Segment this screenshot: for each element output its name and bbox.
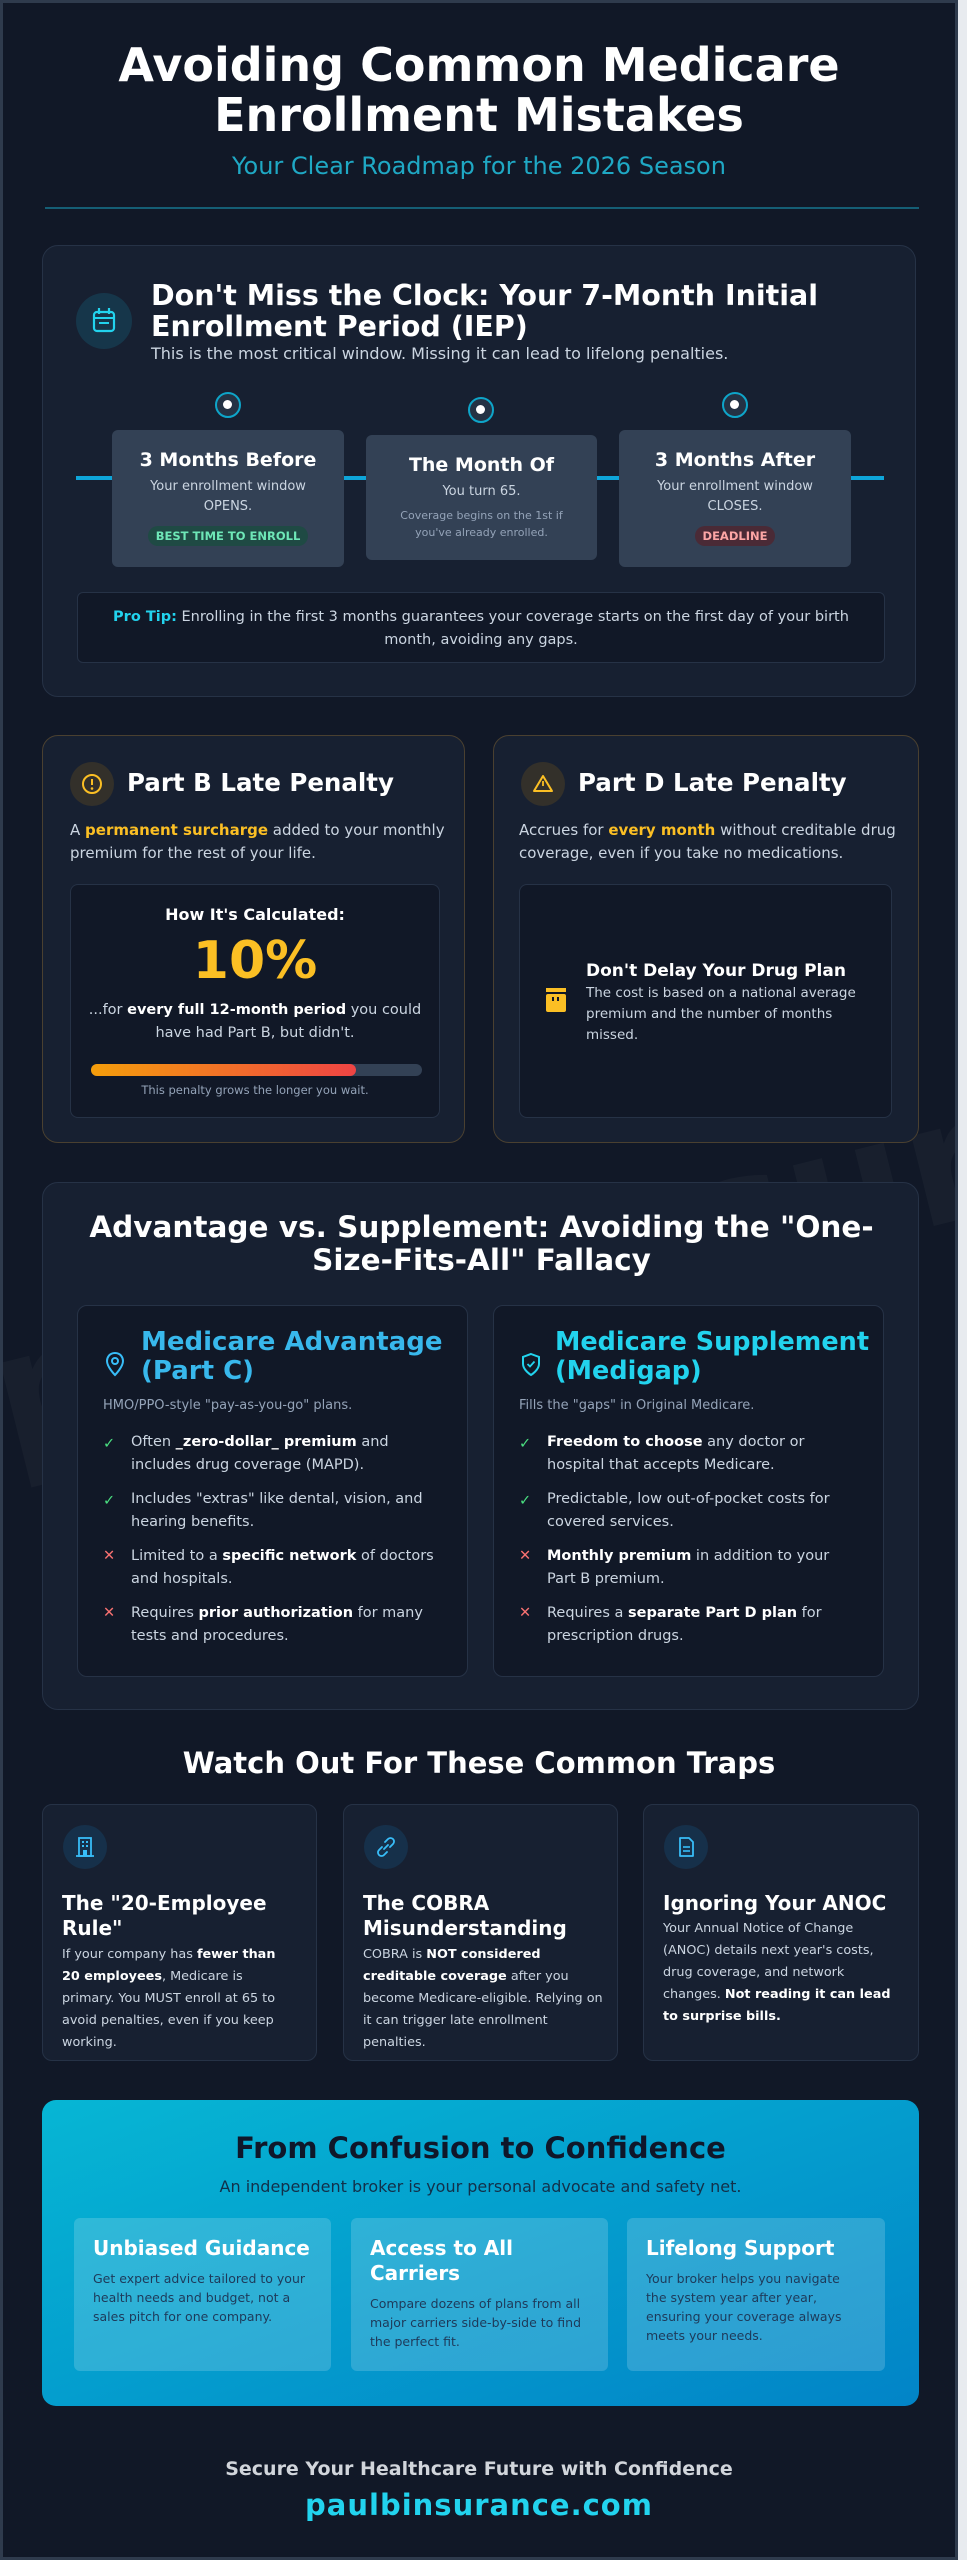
card: Medicare Advantage: ✕ [103,1548,115,1564]
box: 3 months after [619,430,851,567]
calc box: ...for every full 12-month period you could have had Part B, but didn't. [89,1002,421,1041]
subtitle: Your Clear Roadmap for the 2026 Season [232,152,726,180]
trap card: 20-employee: If your company has fewer than 20 employees, Medicare is primary. You MUST enroll at 65 to avoid penalties, even if you keep working. [62,1947,275,2050]
panel: CTA confidence [42,2100,919,2406]
box: month of [366,435,597,560]
card: Medicare Advantage: (Part C) [141,1356,254,1386]
box: 3 months before: OPENS. [204,499,252,514]
panel: CTA confidence: From Confusion to Confidence [235,2131,726,2165]
card: Medicare Supplement: ✓ [519,1493,531,1509]
benefit: carriers: Access to All Carriers [370,2236,513,2285]
timeline [76,392,884,567]
panel: Advantage vs Supplement [42,1182,919,1710]
10%: 10% [193,931,317,991]
card: Medicare Supplement: ✕ [519,1605,531,1621]
trap card: COBRA: COBRA is NOT considered creditable coverage after you become Medicare-eligible. Relying on it can trigger late enrollment penalties. [363,1947,603,2050]
panel: Part D penalty [493,735,919,1143]
box: 3 months before [112,430,344,567]
benefit: lifelong: Lifelong Support [646,2236,834,2260]
card: Medicare Advantage: ✓ [103,1493,115,1509]
card: Medicare Advantage: Often _zero-dollar_ premium and includes drug coverage (MAPD). [131,1434,389,1473]
footer url: paulbinsurance.com [305,2488,653,2522]
heading: Part B Late Penalty [127,768,394,797]
drug plan box [519,884,892,1118]
heading: traps: Watch Out For These Common Traps [183,1746,775,1780]
panel: IEP [42,245,916,697]
card: Medicare Advantage: ✓ [103,1436,115,1452]
dot 1 [215,392,241,418]
card: Medicare Supplement: Monthly premium in addition to your Part B premium. [547,1548,829,1587]
benefit: unbiased: Unbiased Guidance [93,2236,310,2260]
trap card: COBRA [343,1804,618,2061]
footer tagline: Secure Your Healthcare Future with Confidence [225,2458,733,2480]
trap card: COBRA: The COBRA Misunderstanding [363,1891,567,1940]
icon: calendar [76,293,132,349]
card: Medicare Supplement: Predictable, low out-of-pocket costs for covered services. [547,1491,830,1530]
box: 3 months before: 3 Months Before [140,449,316,471]
card: Medicare Advantage: Includes "extras" like dental, vision, and hearing benefits. [131,1491,423,1530]
icon: alert [70,762,114,806]
panel: Part B penalty [42,735,465,1143]
card: Medicare Supplement: Fills the "gaps" in Original Medicare. [519,1398,754,1413]
card: Medicare Supplement: Freedom to choose any doctor or hospital that accepts Medicare. [547,1434,804,1473]
benefit: carriers: Compare dozens of plans from all major carriers side-by-side to find the perfect fit. [370,2296,581,2349]
drug plan box: The cost is based on a national average premium and the number of months missed. [586,985,856,1043]
heading: Advantage vs. Supplement: Avoiding the "One-Size-Fits-All" Fallacy [89,1210,874,1277]
dot 3 [722,392,748,418]
pro tip [77,592,885,663]
card: Medicare Advantage: ✕ [103,1605,115,1621]
icon: pill bottle [546,988,566,1012]
box: month of: You turn 65. [442,484,521,499]
box: 3 months after: Your enrollment window [657,479,813,494]
trap card: ANOC [643,1804,919,2061]
box: month of: Coverage begins on the 1st if [400,509,563,522]
card: Medicare Supplement: (Medigap) [555,1356,702,1386]
trap card: ANOC: Your Annual Notice of Change (ANOC) details next year's costs, drug coverage, and network changes. Not reading it can lead to surprise bills. [663,1921,890,2024]
benefit: unbiased [74,2218,331,2371]
box: 3 months before: Your enrollment window [150,479,306,494]
dot 2 [468,397,494,423]
trap card: 20-employee [42,1804,317,2061]
progress bar [91,1064,422,1076]
benefit: carriers [351,2218,608,2371]
card: Medicare Advantage [77,1305,468,1677]
panel: CTA confidence: An independent broker is your personal advocate and safety net. [220,2177,741,2196]
box: 3 months after: 3 Months After [655,449,815,471]
drug plan box: Don't Delay Your Drug Plan [586,961,846,981]
card: Medicare Supplement: ✕ [519,1548,531,1564]
heading: Part D Late Penalty [578,768,847,797]
box: month of: The Month Of [409,454,554,476]
icon: warning [521,762,565,806]
subtext: This is the most critical window. Missing it can lead to lifelong penalties. [151,344,728,363]
title: Enrollment Mistakes [214,88,744,142]
benefit: lifelong: Your broker helps you navigate the system year after year, ensuring your coverage always meets your needs. [646,2271,842,2343]
trap card: ANOC: Ignoring Your ANOC [663,1891,886,1915]
box: month of: you've already enrolled. [415,526,548,539]
benefit: unbiased: Get expert advice tailored to your health needs and budget, not a sales pitch for one company. [93,2271,305,2324]
card: Medicare Supplement: ✓ [519,1436,531,1452]
heading: Don't Miss the Clock: Your 7-Month Initial Enrollment Period (IEP) [151,279,818,343]
card: Medicare Advantage: Limited to a specific network of doctors and hospitals. [131,1548,434,1587]
trap card: 20-employee: The "20-Employee Rule" [62,1891,267,1940]
calc box [70,884,440,1118]
card: Medicare Advantage: Medicare Advantage [141,1327,442,1357]
calc box: This penalty grows the longer you wait. [141,1083,369,1097]
benefit: lifelong [627,2218,885,2371]
desc: Accrues for every month without creditable drug coverage, even if you take no medications. [519,821,896,862]
calc box: How It's Calculated: [165,905,345,924]
box: 3 months after: CLOSES. [708,499,762,514]
card: Medicare Supplement [493,1305,884,1677]
pro tip: Pro Tip: Enrolling in the first 3 months guarantees your coverage starts on the first day of your birth month, avoiding any gaps. [113,609,849,648]
card: Medicare Advantage: HMO/PPO-style "pay-as-you-go" plans. [103,1398,352,1413]
card: Medicare Supplement: Requires a separate Part D plan for prescription drugs. [547,1605,822,1644]
desc: A permanent surcharge added to your monthly premium for the rest of your life. [70,821,445,862]
box: 3 months after: DEADLINE [703,529,767,543]
title: Avoiding Common Medicare [118,38,840,92]
box: 3 months before: BEST TIME TO ENROLL [156,529,300,543]
card: Medicare Supplement: Medicare Supplement [555,1327,869,1357]
card: Medicare Advantage: Requires prior authorization for many tests and procedures. [131,1605,423,1644]
title [118,38,840,142]
